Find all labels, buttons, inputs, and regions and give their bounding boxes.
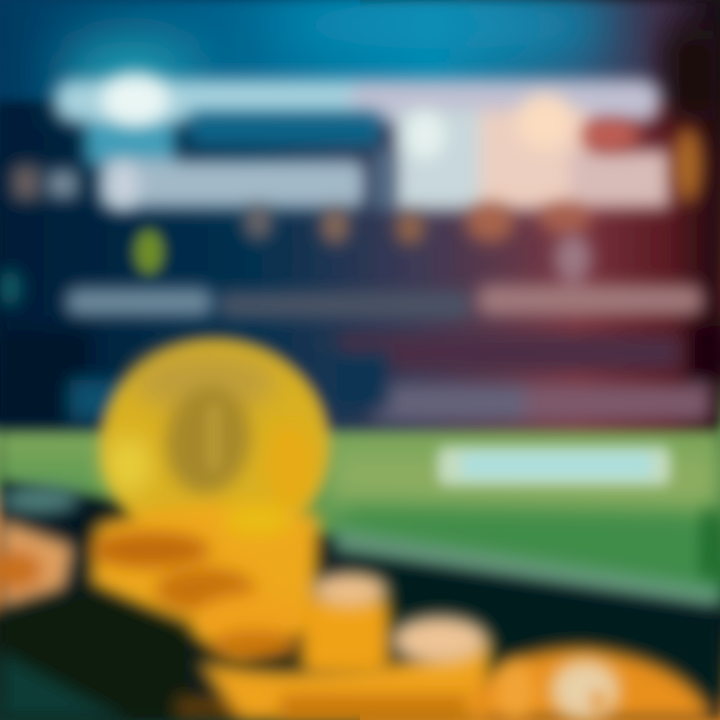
orange lights row <box>244 202 591 244</box>
green emblem <box>134 229 164 275</box>
pitch banner <box>438 447 670 485</box>
coin stack: centre <box>90 504 320 660</box>
dark foreground: lower left <box>0 590 365 720</box>
coin stack: right <box>470 648 715 720</box>
pitch <box>0 432 720 608</box>
dark foreground band <box>345 560 720 700</box>
coin stack: left <box>0 518 75 610</box>
dark banner strip <box>190 112 380 146</box>
stand glow: upper text band <box>12 80 670 210</box>
gold coin <box>101 340 329 550</box>
lower stands <box>0 325 720 425</box>
stand highlights <box>101 74 702 210</box>
coin stack: steps toward right <box>195 572 490 720</box>
lower stand text <box>0 234 703 318</box>
